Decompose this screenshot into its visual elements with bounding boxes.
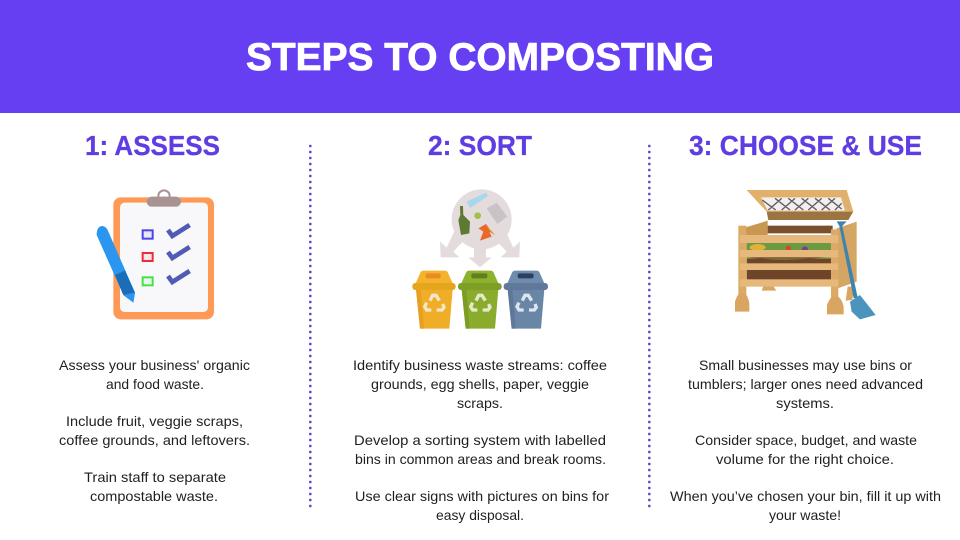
text block: assess: Assess your business' organic <box>59 357 250 373</box>
text block: choose and use: your waste! <box>769 507 841 523</box>
text block: choose and use: tumblers; larger ones need advanced <box>688 376 923 392</box>
text block: choose and use: Consider space, budget, and waste <box>695 432 917 448</box>
text block: choose and use: Small businesses may use bins or <box>699 357 912 373</box>
green bin <box>458 271 502 329</box>
title: STEPS TO COMPOSTING <box>246 36 714 79</box>
text block: sort: bins in common areas and break rooms. <box>355 451 606 467</box>
front legs <box>735 293 844 314</box>
heading: 3 choose and use: 3: CHOOSE & USE <box>689 130 922 161</box>
text block: choose and use: When you’ve chosen your bin, fill it up with <box>670 488 941 504</box>
text block: assess: Train staff to separate <box>84 469 226 485</box>
shovel <box>837 221 858 298</box>
text block: sort: easy disposal. <box>436 507 524 523</box>
text block: sort: Develop a sorting system with labelled <box>354 432 606 448</box>
lid <box>747 190 853 212</box>
text block: sort <box>353 357 609 523</box>
text block: sort: Use clear signs with pictures on bins for <box>355 488 609 504</box>
text block: sort: Identify business waste streams: coffee <box>353 357 607 373</box>
text block: assess: Include fruit, veggie scraps, <box>66 413 243 429</box>
text block: choose and use: volume for the right choice. <box>716 451 894 467</box>
text block: choose and use <box>670 357 941 523</box>
text block: sort: grounds, egg shells, paper, veggie <box>371 376 589 392</box>
text block: assess <box>59 357 250 504</box>
icon: sorting into three bins <box>412 189 548 329</box>
header band <box>0 0 960 113</box>
text block: assess: coffee grounds, and leftovers. <box>59 432 250 448</box>
blue bin <box>504 271 548 329</box>
text block: assess: compostable waste. <box>90 488 218 504</box>
yellow bin <box>412 271 456 329</box>
posts and slats <box>738 226 838 298</box>
icon: wooden compost bin with shovel <box>735 190 876 319</box>
text block: sort: scraps. <box>457 395 503 411</box>
text block: choose and use: systems. <box>776 395 834 411</box>
text block: assess: and food waste. <box>106 376 204 392</box>
icon: clipboard checklist <box>97 190 214 319</box>
side panel and back <box>837 222 857 288</box>
heading: 1 assess: 1: ASSESS <box>85 130 220 161</box>
back legs <box>762 286 854 301</box>
heading: 2 sort: 2: SORT <box>428 130 532 161</box>
